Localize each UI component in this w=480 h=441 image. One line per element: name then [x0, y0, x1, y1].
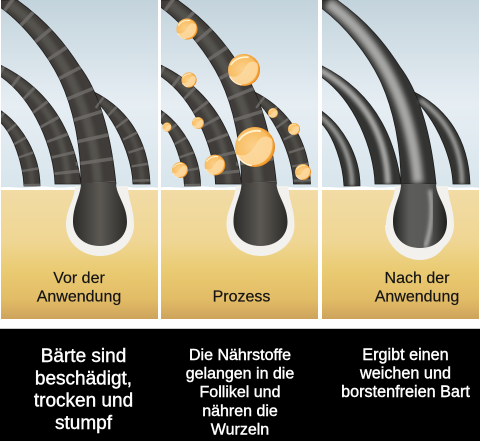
label: Vor der Anwendung: Anwendung	[37, 288, 121, 306]
hair strands	[160, 0, 310, 186]
sky background	[161, 0, 318, 190]
caption: process: Die Nährstoffe	[189, 347, 291, 364]
panel: process	[160, 0, 320, 319]
caption: process: gelangen in die	[186, 366, 294, 382]
hair strands, smooth	[320, 0, 470, 186]
caption: process: Wurzeln	[211, 422, 269, 438]
hair root bulb	[73, 183, 127, 246]
caption: after treatment: Ergibt einen	[362, 346, 449, 364]
skin layer	[1, 188, 158, 319]
label: Nach der Anwendung: Anwendung	[375, 288, 459, 306]
caption: before treatment: beschädigt,	[35, 368, 132, 390]
skin layer	[322, 188, 479, 319]
label: Prozess: Prozess	[213, 288, 270, 306]
panel: before treatment	[0, 0, 160, 319]
follicle opening	[160, 186, 320, 256]
label: Nach der Anwendung: Nach der	[385, 270, 450, 287]
panel: after treatment	[320, 0, 480, 319]
caption: before treatment: trocken und	[34, 390, 133, 412]
hair root bulb	[393, 184, 447, 248]
hair strands, damaged	[0, 0, 150, 186]
caption: before treatment: Bärte sind	[41, 346, 126, 367]
skin layer	[161, 188, 318, 319]
label: Vor der Anwendung: Vor der	[53, 270, 105, 287]
caption: process: nähren die	[202, 403, 278, 420]
caption band	[0, 328, 480, 441]
follicle opening	[320, 186, 480, 260]
caption: process: Follikel und	[200, 384, 280, 401]
sky background	[1, 0, 158, 190]
caption: after treatment: borstenfreien Bart	[341, 383, 470, 401]
follicle opening	[0, 186, 160, 256]
nutrient droplets	[162, 18, 311, 180]
caption: before treatment: stumpf	[55, 413, 113, 434]
hair root bulb	[234, 183, 288, 246]
sky background	[322, 0, 479, 190]
caption: after treatment: weichen und	[359, 364, 451, 382]
